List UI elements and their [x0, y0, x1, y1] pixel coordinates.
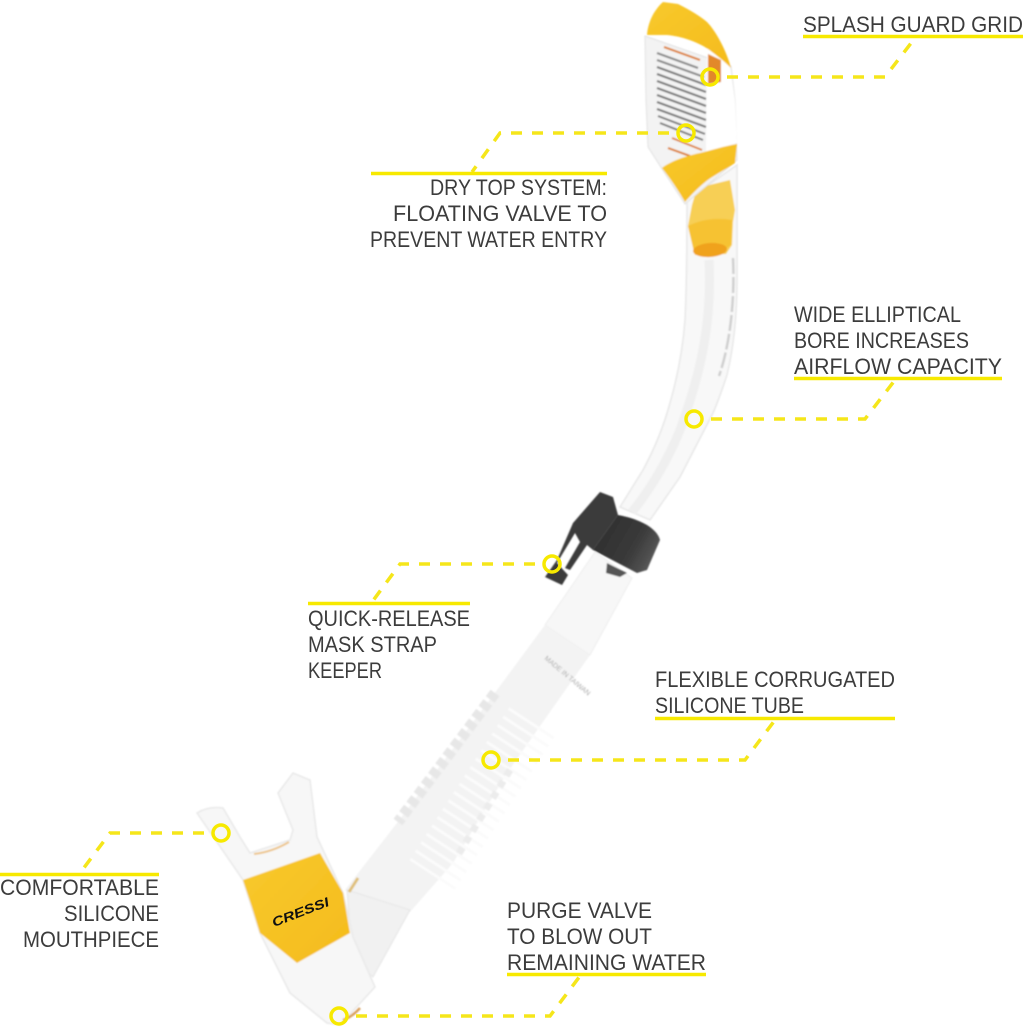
underline — [794, 377, 1002, 380]
white side panel — [706, 48, 737, 152]
marker — [686, 411, 702, 427]
label — [507, 898, 706, 975]
underline — [371, 172, 607, 175]
leader — [356, 976, 580, 1016]
label: PREVENT WATER ENTRY — [370, 227, 607, 252]
mouthpiece clear silicone — [197, 773, 375, 1025]
callout: wide elliptical bore — [686, 302, 1002, 427]
label: BORE INCREASES — [794, 328, 969, 353]
underline — [507, 973, 706, 976]
yellow valve stem — [688, 180, 735, 258]
label: PURGE VALVE — [507, 898, 652, 923]
label — [370, 175, 607, 252]
yellow lower band — [662, 144, 737, 202]
leader — [472, 133, 669, 172]
label: MOUTHPIECE — [23, 927, 159, 952]
marker — [702, 69, 718, 85]
label: AIRFLOW CAPACITY — [794, 354, 1002, 379]
marker — [544, 556, 560, 572]
purge valve housing — [347, 890, 410, 977]
callout: mask strap keeper — [308, 556, 560, 683]
label: WIDE ELLIPTICAL — [794, 302, 961, 327]
leader — [727, 38, 915, 77]
callout: purge valve — [331, 898, 706, 1024]
underline — [803, 35, 1023, 38]
made in text on tube: MADE IN TAIWAN — [543, 655, 591, 697]
corrugated silicone tube — [345, 625, 590, 912]
marker — [213, 825, 229, 841]
label: QUICK-RELEASE — [308, 606, 470, 631]
mouthpiece amber accent — [254, 842, 289, 854]
label: SILICONE — [64, 901, 159, 926]
label: FLEXIBLE CORRUGATED — [655, 667, 895, 692]
black keeper clip — [545, 492, 660, 585]
lower straight tube — [545, 552, 632, 655]
snorkel product illustration — [197, 2, 737, 1025]
callout: silicone mouthpiece — [0, 825, 229, 952]
marker — [678, 125, 694, 141]
callout: dry top system — [370, 125, 694, 252]
label: MASK STRAP — [308, 632, 437, 657]
label: COMFORTABLE — [0, 875, 159, 900]
tube ridge marks — [719, 258, 733, 376]
leader — [711, 380, 895, 419]
underline — [655, 717, 895, 720]
purge amber accent — [343, 1008, 360, 1020]
label — [0, 875, 159, 952]
label — [794, 302, 1002, 379]
upper curved tube — [620, 165, 737, 520]
label: DRY TOP SYSTEM: — [430, 175, 607, 200]
tube amber collar — [349, 878, 358, 892]
yellow mouthpiece band — [243, 853, 350, 963]
leader — [80, 833, 204, 873]
label: SILICONE TUBE — [655, 693, 804, 718]
label — [308, 606, 470, 683]
mouthpiece band brand: CRESSI — [270, 894, 332, 930]
callout: splash guard grid — [702, 12, 1023, 85]
underline — [308, 602, 470, 605]
marker — [331, 1008, 347, 1024]
tube centre highlight — [632, 260, 710, 512]
leader — [508, 720, 775, 760]
splash guard grill — [657, 47, 721, 156]
label: FLOATING VALVE TO — [393, 201, 607, 226]
label: KEEPER — [308, 658, 382, 683]
marker — [483, 752, 499, 768]
callout: flexible corrugated tube — [483, 667, 895, 768]
yellow top cap — [647, 2, 731, 68]
leader — [372, 564, 535, 602]
label — [655, 667, 895, 718]
label: TO BLOW OUT — [507, 924, 652, 949]
dry top transparent body — [645, 36, 737, 204]
label: REMAINING WATER — [507, 950, 706, 975]
underline — [0, 873, 159, 876]
